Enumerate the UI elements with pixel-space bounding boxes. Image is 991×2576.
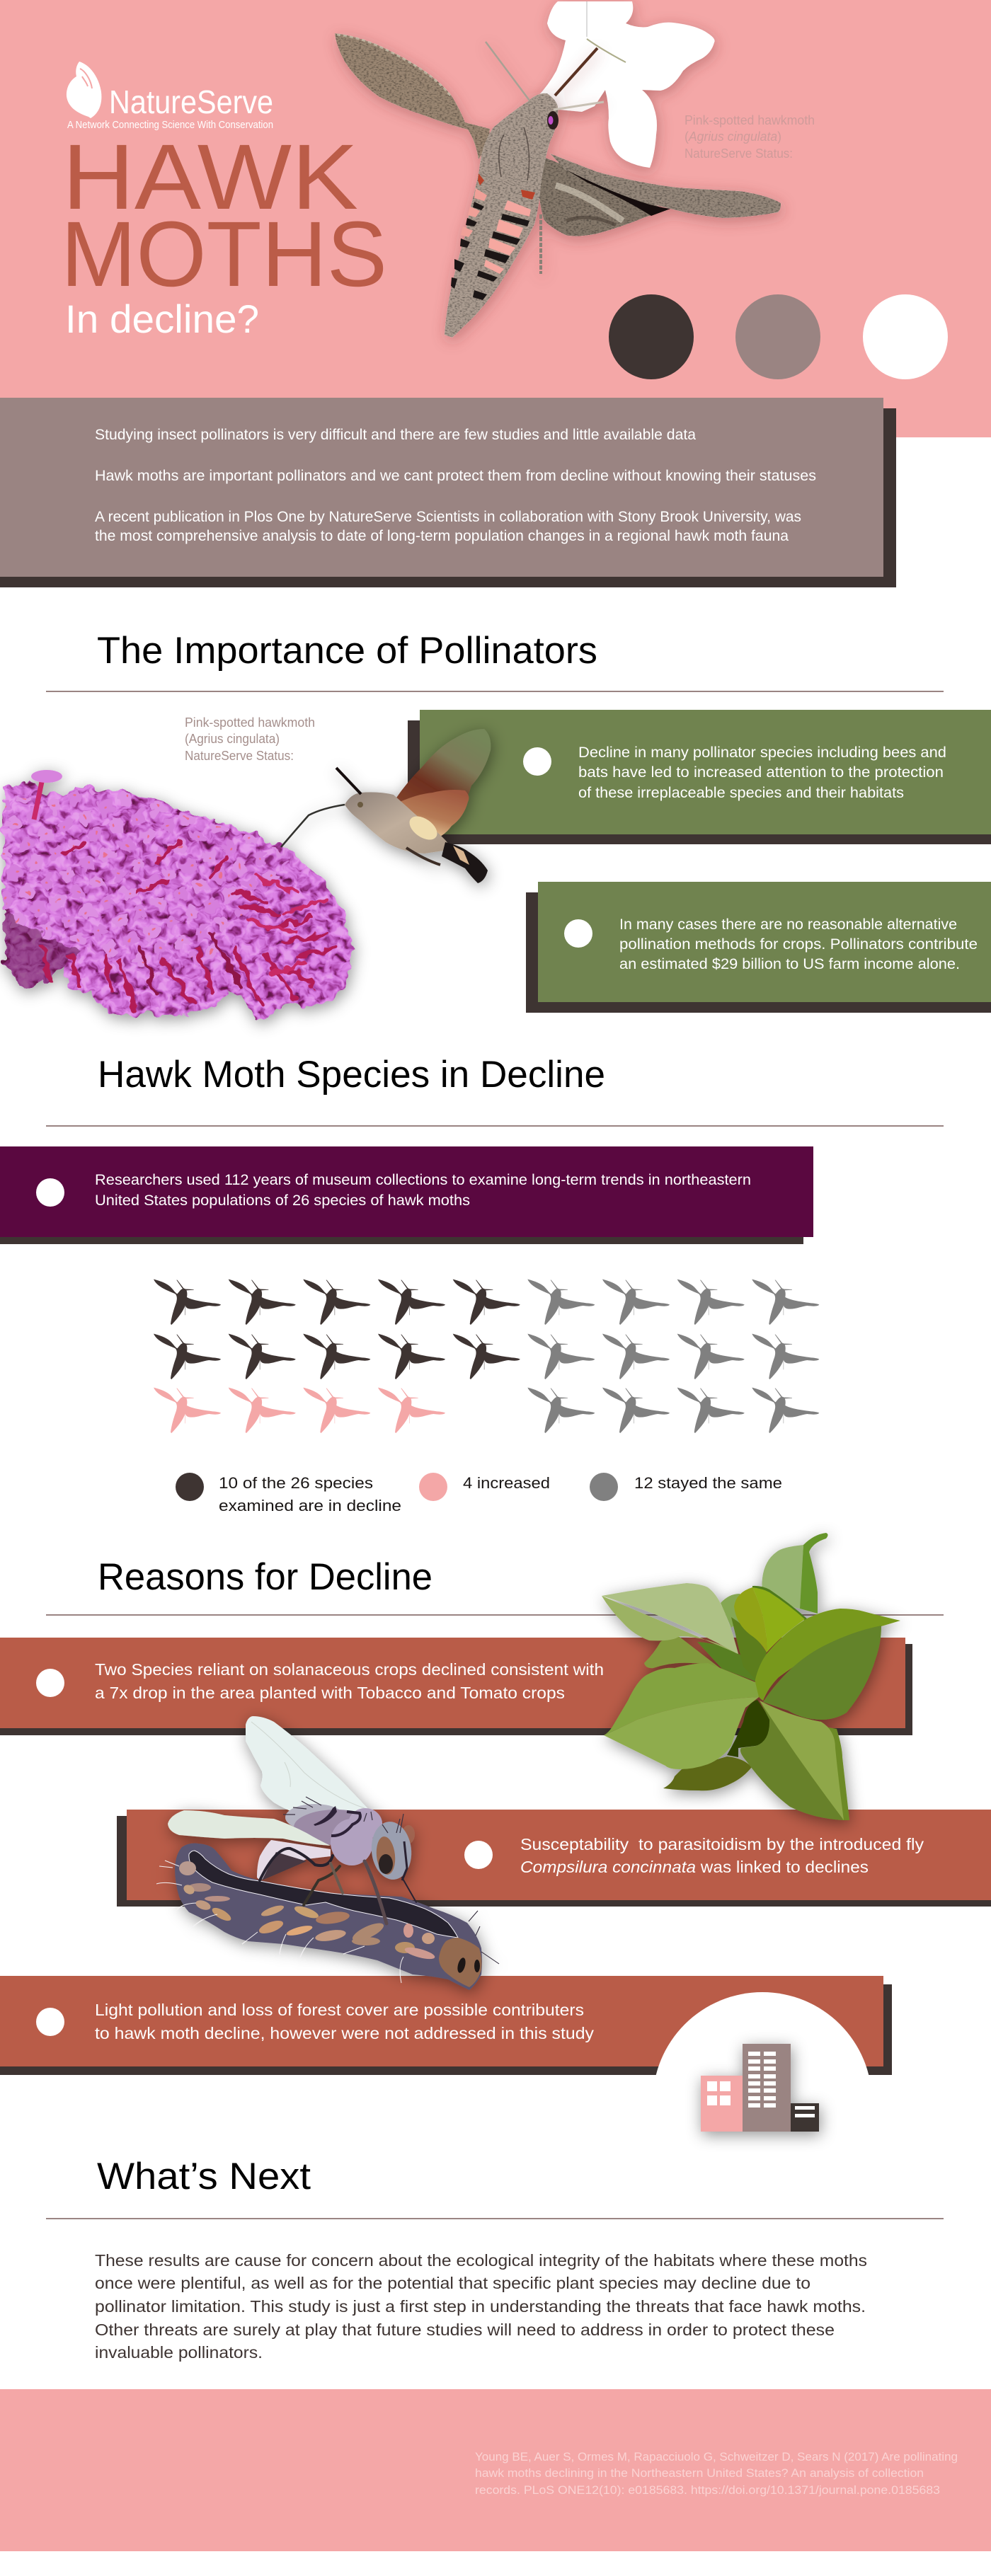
heading: what's next: What’s Next [97, 2156, 311, 2197]
olive small leaf [644, 1637, 720, 1668]
moth hindwing right [538, 157, 667, 236]
caption: pink-spotted hawkmoth: Pink-spotted hawkmoth [684, 113, 815, 127]
caption: pollinator moth: NatureServe Status: [185, 749, 294, 763]
logo wordmark: NatureServe [109, 84, 273, 120]
heading: reasons for decline: Reasons for Decline [98, 1556, 433, 1598]
logo: NatureServe [67, 62, 273, 131]
fly legs [260, 1848, 416, 1924]
moth body [445, 93, 558, 338]
moth forewing left [335, 33, 490, 159]
legs [406, 848, 440, 865]
caption: pink-spotted hawkmoth: (Agrius cingulata) [684, 130, 781, 144]
intro panel shadow [0, 408, 896, 587]
pictogram chart: declining species [154, 1280, 520, 1379]
fly wing lower [168, 1810, 331, 1846]
header background [0, 0, 991, 437]
legend [176, 1473, 782, 1514]
panel: bees and bats: of these irreplaceable species and their habitats [578, 784, 904, 801]
conclusion paragraph: pollinator limitation. This study is just a first step in understanding the threats that face hawk moths. [95, 2297, 866, 2316]
title: MOTHS [61, 202, 387, 306]
cream wing base [406, 812, 441, 844]
heading: the importance of pollinators: The Importance of Pollinators [97, 630, 597, 672]
conclusion paragraph: once were plentiful, as well as for the potential that specific plant species may decline due to [95, 2274, 810, 2292]
title: HAWK [62, 125, 358, 229]
panel: museum collections [0, 1146, 813, 1244]
illustration: fly on caterpillar [156, 1716, 499, 1990]
panel: bees and bats: bats have led to increased attention to the protection [578, 764, 944, 781]
status circles [609, 294, 948, 379]
pale leaf [602, 1596, 738, 1654]
citation [475, 2450, 958, 2497]
intro panel: Hawk moths are important pollinators and we cant protect them from decline without knowing their statuses [95, 467, 816, 484]
flower stalk top blossom [34, 778, 42, 820]
legend: 4 increased [463, 1474, 550, 1492]
intro panel: the most comprehensive analysis to date of long-term population changes in a regional hawk moth fauna [95, 527, 789, 544]
legend: examined are in decline [219, 1497, 401, 1514]
legend: 12 stayed the same [634, 1474, 782, 1492]
panel: bees and bats: Decline in many pollinator species including bees and [578, 744, 946, 761]
title [61, 125, 387, 306]
caption: pink-spotted hawkmoth: NatureServe Status: [684, 146, 793, 161]
citation: records. PLoS ONE12(10): e0185683. https://doi.org/10.1371/journal.pone.0185683 [475, 2483, 940, 2497]
illustration: white flower [537, 1, 715, 168]
red flower tubes [42, 842, 333, 1008]
panel: parasitoidism: Susceptability to parasitoidism by the introduced fly [520, 1835, 924, 1853]
body [345, 792, 453, 853]
panel: solanaceous crops: a 7x drop in the area planted with Tobacco and Tomato crops [95, 1684, 565, 1702]
panel: bees and bats [408, 710, 991, 844]
moth thorax lines [499, 127, 529, 180]
illustration: buildings [701, 2044, 819, 2132]
flower mass [3, 778, 351, 1020]
caption: pollinator moth: (Agrius cingulata) [185, 732, 280, 746]
dark gap [727, 1700, 770, 1757]
small back leaf [721, 1594, 750, 1628]
bottom right leaf [740, 1701, 844, 1820]
caterpillar body [175, 1844, 482, 1990]
panel: crops: pollination methods for crops. Pollinators contribute [619, 936, 978, 953]
caption: pollinator moth [185, 715, 315, 763]
top leaf [762, 1545, 803, 1609]
caption: pollinator moth: Pink-spotted hawkmoth [185, 715, 315, 730]
conclusion paragraph [95, 2251, 867, 2362]
moth wing edge [337, 35, 450, 96]
proboscis [281, 805, 345, 847]
caterpillar head [439, 1938, 482, 1987]
tail [442, 842, 488, 883]
footer band [0, 2389, 991, 2551]
panel: crops: an estimated $29 billion to US farm income alone. [619, 955, 960, 972]
illustration: purple flower cluster [3, 770, 351, 1020]
intro panel: A recent publication in Plos One by NatureServe Scientists in collaboration with Stony Brook University, was [95, 508, 801, 525]
illustration: hummingbird hawk moth [281, 729, 491, 883]
eye [357, 802, 363, 807]
citation: Young BE, Auer S, Ormes M, Rapacciuolo G, Schweitzer D, Sears N (2017) Are pollinating [475, 2450, 958, 2463]
pictogram chart: unchanged species [527, 1280, 819, 1433]
panel: parasitoidism [117, 1810, 991, 1907]
fly head [369, 1819, 415, 1882]
panel: light pollution [0, 1976, 892, 2212]
fly abdomen [257, 1840, 331, 1880]
illustration: hawk moth [335, 33, 781, 338]
conclusion paragraph: Other threats are surely at play that future studies will need to address in order to protect these [95, 2321, 835, 2339]
fly wing veins [251, 1722, 365, 1808]
heading: hawk moth species in decline: Hawk Moth Species in Decline [98, 1054, 605, 1096]
panel: light pollution: to hawk moth decline, however were not addressed in this study [95, 2024, 595, 2042]
flower texture [3, 778, 351, 1020]
legend: 10 of the 26 species [219, 1474, 373, 1492]
intro panel [0, 398, 883, 577]
moth forewing right [550, 154, 781, 218]
panel: museum collections: United States populations of 26 species of hawk moths [95, 1192, 470, 1209]
intro panel: Studying insect pollinators is very difficult and there are few studies and little available data [95, 426, 696, 443]
citation: hawk moths declining in the Northeastern United States? An analysis of collection [475, 2466, 924, 2480]
moth eye [547, 111, 558, 130]
subtitle: In decline? [65, 297, 259, 341]
panel: solanaceous crops: Two Species reliant on solanaceous crops declined consistent with [95, 1660, 604, 1679]
big right leaf [755, 1609, 900, 1701]
panel: parasitoidism: Compsilura concinnata was linked to declines [520, 1858, 869, 1876]
panel: crops: In many cases there are no reasonable alternative [619, 916, 957, 933]
caterpillar hairs [156, 1861, 403, 1983]
hindwing [399, 790, 469, 840]
panel: solanaceous crops [0, 1638, 912, 1735]
caterpillar spots [179, 1861, 436, 1961]
pictogram chart: increased species [154, 1388, 445, 1433]
icon: butterfly logo [67, 62, 101, 118]
caterpillar [156, 1844, 499, 1990]
fly bristles [283, 1797, 403, 1833]
florets [3, 790, 290, 977]
big left leaf [604, 1697, 759, 1769]
moth abdomen stripes [451, 173, 535, 300]
antenna [336, 768, 361, 794]
dark building [791, 2103, 819, 2132]
panel: light pollution: Light pollution and loss of forest cover are possible contributers [95, 2001, 584, 2019]
illustration: plant leaves [602, 1533, 900, 1820]
caption: pink-spotted hawkmoth [684, 113, 815, 161]
fly thorax [285, 1804, 382, 1865]
conclusion paragraph: These results are cause for concern about the ecological integrity of the habitats where these moths [95, 2251, 867, 2270]
dark centre leaves [697, 1642, 756, 1681]
fly wing upper [246, 1716, 377, 1819]
forewing [395, 729, 491, 826]
panel: museum collections: Researchers used 112 years of museum collections to examine long-term trends in northeastern [95, 1171, 751, 1188]
moth antennae, proboscis and leg [486, 42, 604, 274]
pink building [701, 2076, 743, 2132]
gray tower [743, 2044, 791, 2132]
lower dark shading [3, 913, 78, 987]
panel: crops [526, 882, 991, 1013]
brown olive leaf [663, 1756, 752, 1790]
logo tagline: A Network Connecting Science With Conservation [67, 119, 273, 131]
yellow green leaf [752, 1586, 808, 1621]
conclusion paragraph: invaluable pollinators. [95, 2343, 263, 2362]
caterpillar dorsal stripe [189, 1851, 458, 1938]
